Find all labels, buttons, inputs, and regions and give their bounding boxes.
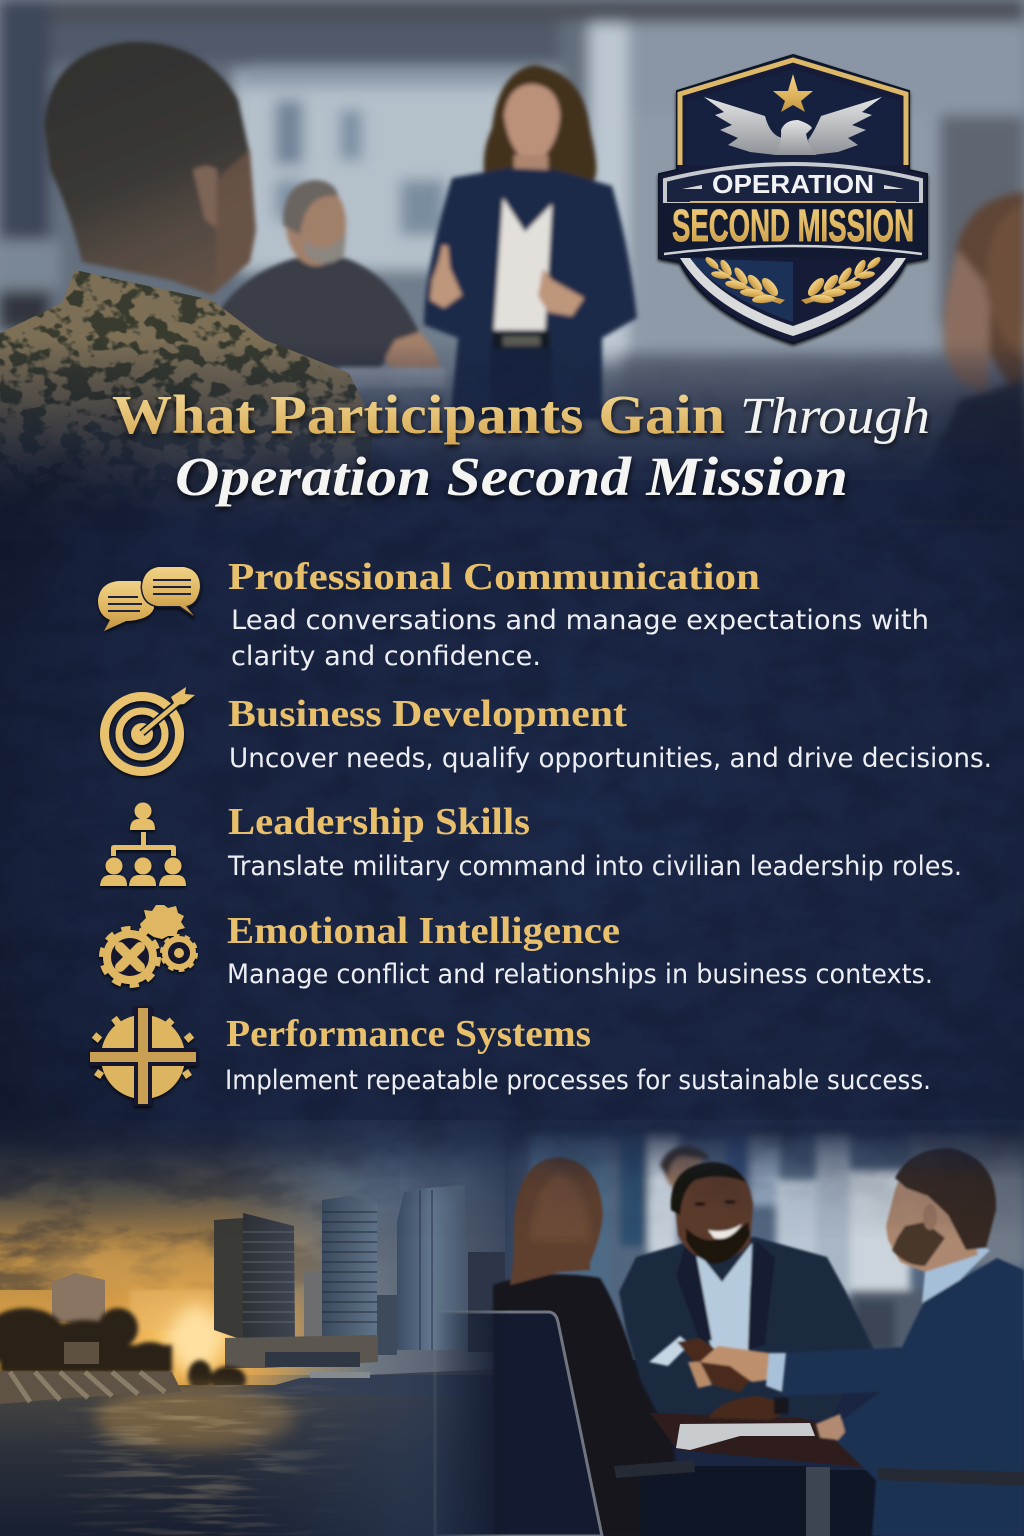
logo gold outline — [680, 60, 906, 165]
text: Performance Systems: Performance Systems — [226, 1013, 591, 1055]
building: centre tower — [322, 1196, 377, 1340]
logo star — [773, 74, 813, 112]
title — [112, 384, 930, 507]
top photo: office presentation scene — [0, 0, 1024, 520]
bottom photo: skyline and business handshake — [0, 1120, 1024, 1536]
text: Professional Communication — [228, 556, 929, 672]
text: Emotional Intelligence — [227, 910, 933, 990]
logo eagle — [704, 97, 882, 155]
icon: organisation chart — [100, 802, 186, 886]
text: Professional Communication: clarity and confidence. — [231, 641, 541, 672]
building: twin tower — [214, 1213, 295, 1340]
building: left hotel — [52, 1273, 105, 1328]
handshake — [649, 1336, 788, 1420]
top fade into navy — [0, 345, 1024, 520]
text: Professional Communication: Professional Communication — [228, 556, 760, 598]
icon: gears — [102, 905, 196, 985]
logo badge: Operation Second Mission — [659, 55, 927, 343]
text: Performance Systems — [225, 1013, 931, 1096]
text: Leadership Skills: Translate military command into civilian leadership roles. — [227, 851, 962, 882]
figure: man in profile — [782, 1148, 1024, 1536]
figure: smiling man — [619, 1162, 874, 1420]
logo laurels — [704, 255, 882, 304]
text: Emotional Intelligence: Manage conflict and relationships in business contexts. — [227, 959, 933, 990]
title: Through — [740, 388, 930, 445]
figure: presenter woman — [424, 65, 637, 428]
chair armrests — [614, 1460, 1024, 1486]
figure: background person — [660, 1146, 710, 1192]
logo banner — [665, 164, 921, 204]
text: Business Development: Uncover needs, qualify opportunities, and drive decisions. — [229, 743, 992, 774]
icon: performance systems cross gear — [90, 1006, 198, 1106]
figure: woman from behind — [493, 1157, 680, 1536]
trees on left bank — [0, 1308, 246, 1394]
title: What Participants Gain — [112, 384, 725, 445]
figure: seated man — [218, 180, 445, 388]
figure: woman in right foreground — [900, 192, 1024, 520]
icon: speech bubbles — [98, 567, 200, 631]
text: Leadership Skills: Leadership Skills — [228, 801, 530, 843]
text: Business Development — [228, 693, 992, 774]
text: Professional Communication: Lead conversations and manage expectations with — [231, 605, 929, 636]
meeting room backdrop — [505, 1120, 1024, 1360]
waterfront low buildings — [225, 1335, 378, 1368]
text: Business Development: Business Development — [228, 693, 627, 735]
text: Emotional Intelligence: Emotional Intelligence — [227, 910, 620, 952]
text: Performance Systems: Implement repeatable processes for sustainable success. — [225, 1065, 931, 1096]
embankment — [0, 1371, 182, 1404]
title: Operation Second Mission — [175, 446, 848, 507]
text: Leadership Skills — [227, 801, 962, 882]
mottled texture overlay — [0, 357, 1024, 1228]
logo text: OPERATION: OPERATION — [712, 169, 874, 199]
bottom fade from navy — [0, 1100, 1024, 1180]
conference table — [640, 1413, 880, 1536]
office chair — [435, 1312, 602, 1536]
building: right tower — [397, 1185, 468, 1350]
icon: target with arrow — [104, 687, 195, 772]
river water — [0, 1368, 520, 1536]
logo lower silver edge — [680, 258, 906, 336]
skyline at sunset — [0, 1120, 520, 1536]
figure: soldier from behind — [0, 40, 372, 499]
